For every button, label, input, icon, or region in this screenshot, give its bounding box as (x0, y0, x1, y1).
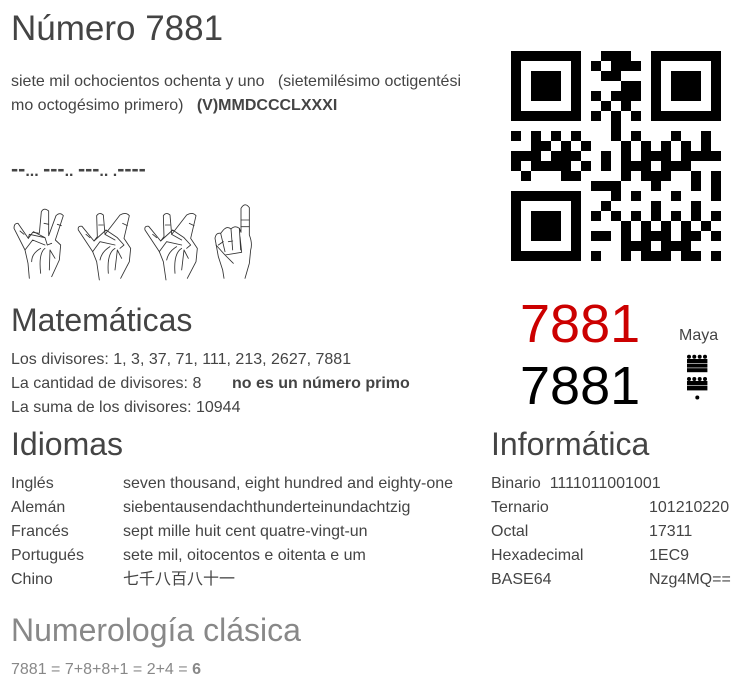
icon: hand eight (78, 213, 131, 280)
language table: Alemán (11, 499, 65, 516)
red number: 7881 (520, 294, 640, 354)
computing table: Nzg4MQ== (649, 571, 731, 588)
QR code (511, 51, 721, 261)
icon: hand seven (14, 209, 63, 278)
language table: sept mille huit cent quatre-vingt-un (123, 523, 368, 540)
language table (11, 475, 453, 588)
computing table: Ternario (491, 499, 549, 516)
language table: Francés (11, 523, 69, 540)
computing table: Hexadecimal (491, 547, 583, 564)
divisor sum: La suma de los divisores: 10944 (11, 399, 240, 416)
computing table: BASE64 (491, 571, 551, 588)
sign language hands (14, 204, 252, 280)
language table: Portugués (11, 547, 84, 564)
heading: Numerología clásica: Numerología clásica (11, 612, 301, 648)
language table: Inglés (11, 475, 54, 492)
prime note: no es un número primo (232, 375, 410, 392)
icon: hand eight (145, 213, 197, 280)
number in words (11, 73, 461, 114)
computing table: 101210220 (649, 499, 729, 516)
computing table: Binario 1111011001001 (491, 475, 661, 492)
black number: 7881 (520, 356, 640, 416)
language table: 七千八百八十一 (123, 571, 235, 588)
heading: Idiomas: Idiomas (11, 426, 123, 462)
morse code: --... ---.. ---.. .---- (11, 157, 146, 181)
Maya label: Maya (679, 327, 718, 344)
numerology sum: 7881 = 7+8+8+1 = 2+4 = 6 (11, 661, 201, 678)
language table: Chino (11, 571, 53, 588)
number in words: siete mil ochocientos ochenta y uno (sietemilésimo octigentési (11, 73, 461, 90)
language table: sete mil, oitocentos e oitenta e um (123, 547, 366, 564)
computing table: 17311 (649, 523, 692, 540)
number in words: mo octogésimo primero) (V)MMDCCCLXXXI (11, 97, 337, 114)
heading: Informática: Informática (491, 426, 649, 462)
heading: Matemáticas: Matemáticas (11, 302, 192, 338)
title: Número 7881 (11, 9, 223, 48)
divisor count: La cantidad de divisores: 8 (11, 375, 201, 392)
language table: siebentausendachthunderteinundachtzig (123, 499, 410, 516)
computing table (491, 475, 731, 588)
language table: seven thousand, eight hundred and eighty-one (123, 475, 453, 492)
divisors: Los divisores: 1, 3, 37, 71, 111, 213, 2627, 7881 (11, 351, 351, 368)
Maya numeral (687, 354, 708, 400)
computing table: Octal (491, 523, 528, 540)
computing table: 1EC9 (649, 547, 689, 564)
icon: hand one (215, 205, 251, 278)
